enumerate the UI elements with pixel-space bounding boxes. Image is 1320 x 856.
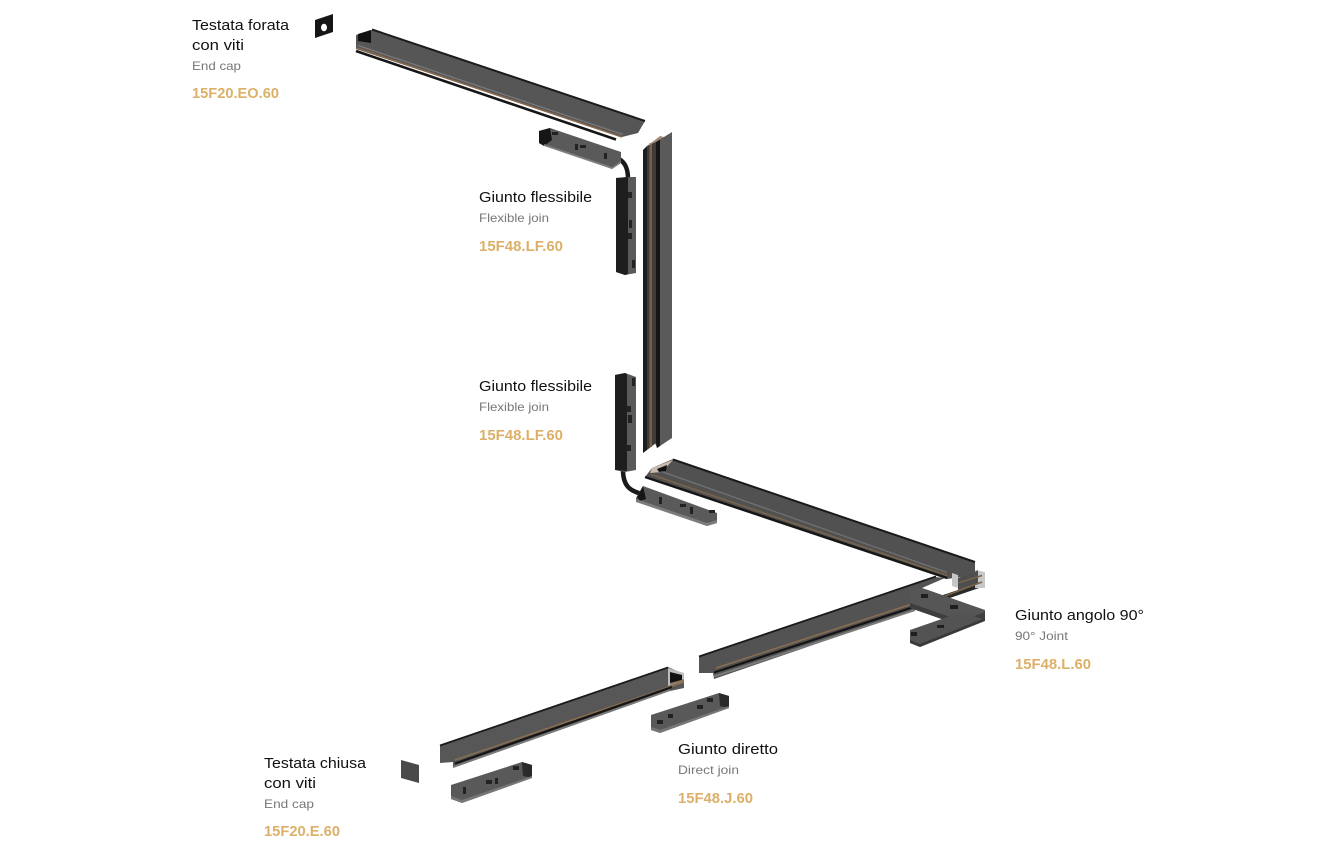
icon: closed end cap — [401, 760, 419, 783]
vertical rail — [643, 132, 672, 453]
right-angle rail joint — [943, 570, 985, 600]
bottom rail — [440, 667, 684, 768]
label: 90-degree joint — [1015, 607, 1144, 673]
label: end cap with holes — [192, 17, 290, 102]
label: closed end cap: 15F20.E.60 — [264, 824, 340, 840]
label: flexible join, upper — [479, 189, 592, 255]
label: closed end cap: con viti — [264, 775, 316, 792]
label: 90-degree joint: 15F48.L.60 — [1015, 657, 1091, 673]
top rail — [356, 30, 645, 140]
label: flexible join, upper: Giunto flessibile — [479, 189, 592, 206]
label: 90-degree joint: 90° Joint — [1015, 629, 1069, 643]
direct join connector — [651, 693, 729, 733]
label: direct join: 15F48.J.60 — [678, 791, 753, 807]
label: flexible join, lower — [479, 378, 592, 444]
label: flexible join, lower: Giunto flessibile — [479, 378, 592, 395]
label: direct join — [678, 741, 778, 807]
second rail — [699, 576, 945, 679]
label: 90-degree joint: Giunto angolo 90° — [1015, 607, 1144, 624]
label: end cap with holes: con viti — [192, 37, 244, 54]
label: flexible join, lower: Flexible join — [479, 400, 549, 414]
label: closed end cap: Testata chiusa — [264, 755, 367, 772]
label: direct join: Direct join — [678, 763, 739, 777]
icon: perforated end cap — [315, 14, 333, 38]
label: flexible join, upper: Flexible join — [479, 211, 549, 225]
label: flexible join, lower: 15F48.LF.60 — [479, 428, 563, 444]
label: end cap with holes: 15F20.EO.60 — [192, 86, 279, 102]
middle rail — [645, 459, 975, 579]
lower join connector — [451, 762, 532, 803]
label: closed end cap: End cap — [264, 797, 314, 811]
label: closed end cap — [264, 755, 367, 840]
flexible join, lower — [615, 373, 717, 526]
label: end cap with holes: End cap — [192, 59, 241, 73]
label: end cap with holes: Testata forata — [192, 17, 290, 34]
90-degree joint connector — [910, 588, 985, 647]
label: direct join: Giunto diretto — [678, 741, 778, 758]
label: flexible join, upper: 15F48.LF.60 — [479, 239, 563, 255]
flexible join, upper — [539, 128, 636, 275]
